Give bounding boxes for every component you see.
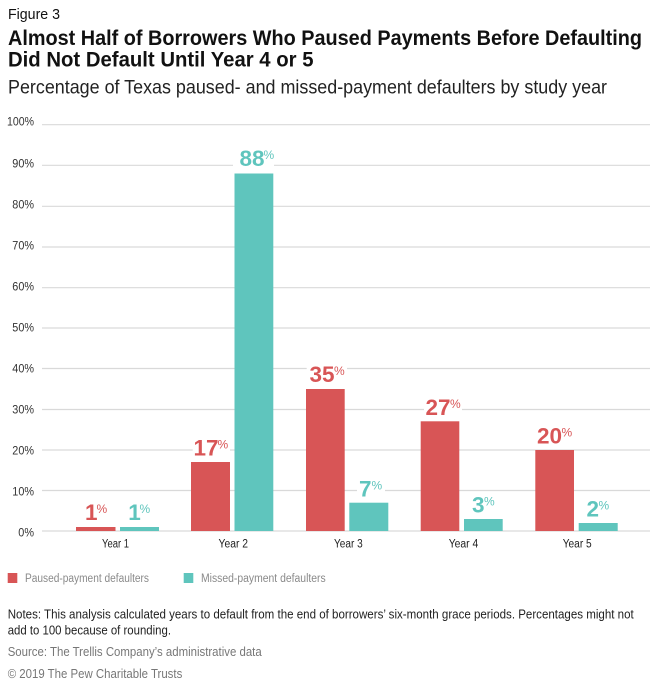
source: Source: The Trellis Company’s administrative data <box>8 644 262 659</box>
value labels: 27 <box>426 395 451 420</box>
value labels: % <box>218 438 228 452</box>
year 4 bars <box>421 421 503 531</box>
x axis labels: Year 1 <box>102 539 129 551</box>
x axis labels: Year 3 <box>334 539 363 551</box>
value labels: % <box>372 479 382 493</box>
value labels: 3 <box>472 493 485 518</box>
value labels: 35 <box>310 362 335 387</box>
x axis labels: Year 5 <box>563 539 592 551</box>
x axis labels: Year 2 <box>218 539 248 551</box>
value labels: 7 <box>359 477 372 502</box>
value labels: % <box>562 426 572 440</box>
y axis labels: 70% <box>12 240 34 252</box>
value labels <box>85 146 610 525</box>
x axis labels <box>102 539 592 551</box>
value labels: % <box>96 502 108 516</box>
y axis labels: 80% <box>12 200 34 212</box>
title <box>8 26 642 72</box>
legend <box>8 573 326 585</box>
legend: Paused-payment defaulters <box>25 573 149 585</box>
year 3 bars <box>306 389 388 531</box>
copyright: © 2019 The Pew Charitable Trusts <box>8 666 182 681</box>
value labels: % <box>140 502 150 516</box>
value labels: 20 <box>537 424 562 449</box>
year 5 bars <box>535 450 618 531</box>
y axis labels: 90% <box>12 158 34 170</box>
y axis labels: 50% <box>12 322 34 334</box>
value labels: 1 <box>128 500 141 525</box>
figure label: Figure 3 <box>8 7 60 23</box>
title: Did Not Default Until Year 4 or 5 <box>8 48 314 72</box>
y axis labels: 100% <box>7 116 34 128</box>
value labels: 17 <box>194 436 219 461</box>
value labels: 88 <box>240 146 265 171</box>
bar chart <box>7 116 650 551</box>
value labels: 1 <box>85 500 98 525</box>
y axis labels: 30% <box>12 404 34 416</box>
x axis labels: Year 4 <box>449 539 479 551</box>
year 2 bars <box>191 174 273 531</box>
y axis labels: 0% <box>18 528 34 540</box>
year 1 bars <box>76 527 159 531</box>
value labels: % <box>598 499 610 513</box>
y axis labels: 10% <box>12 486 34 498</box>
value labels: % <box>484 495 495 509</box>
y axis labels <box>7 116 34 540</box>
value labels: % <box>450 397 461 411</box>
subtitle: Percentage of Texas paused- and missed-payment defaulters by study year <box>8 77 607 99</box>
y axis labels: 60% <box>12 282 34 294</box>
value labels: % <box>264 148 274 162</box>
legend: Missed-payment defaulters <box>201 573 326 585</box>
value labels: % <box>334 364 345 378</box>
y axis labels: 40% <box>12 364 34 376</box>
value labels: 2 <box>586 497 599 522</box>
notes <box>8 606 634 637</box>
y axis labels: 20% <box>12 446 34 458</box>
notes: add to 100 because of rounding. <box>8 622 171 637</box>
